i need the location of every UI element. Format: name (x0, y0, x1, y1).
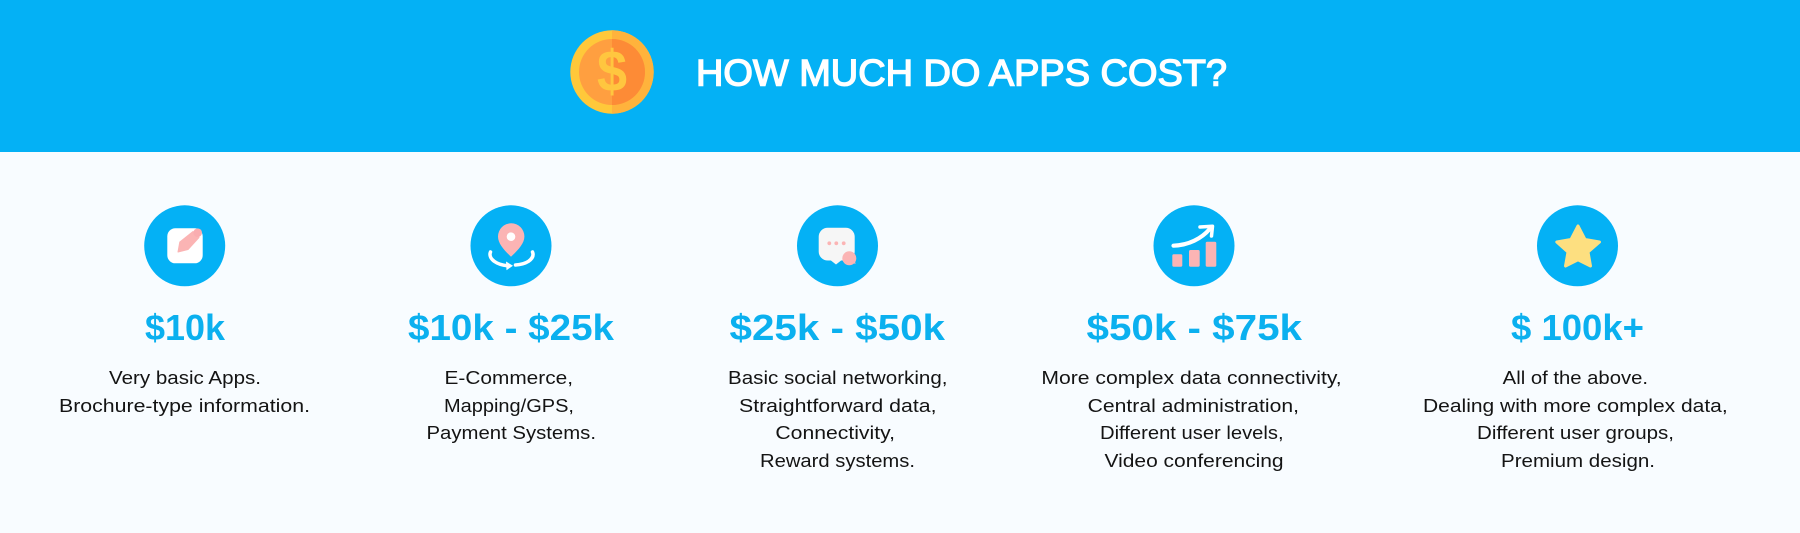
description (426, 367, 596, 443)
panel: $50k-$75k tier (1041, 205, 1342, 471)
description: Payment Systems. (426, 422, 596, 443)
price heading: $10k (145, 307, 226, 348)
panel: $100k+ tier (1423, 205, 1728, 471)
description: Premium design. (1501, 450, 1655, 471)
icon: chat bubble (797, 205, 878, 286)
description: Video conferencing (1104, 450, 1284, 471)
icon: growth bars with arrow (1154, 205, 1234, 286)
description: Mapping/GPS, (444, 395, 574, 416)
description: Different user levels, (1100, 422, 1284, 443)
description: Very basic Apps. (109, 367, 261, 388)
price heading: $50k - $75k (1086, 307, 1303, 348)
icon: map pin (470, 205, 552, 286)
description (728, 367, 948, 471)
panel: $10k tier (59, 205, 310, 416)
description: Dealing with more complex data, (1423, 395, 1728, 416)
price heading: $10k - $25k (408, 307, 615, 348)
description (1041, 367, 1342, 471)
description: Different user groups, (1477, 422, 1674, 443)
description: Central administration, (1088, 395, 1299, 416)
icon: dollar coin: $ (597, 39, 627, 104)
description: Brochure-type information. (59, 395, 310, 416)
panel: $10k-$25k tier (408, 205, 615, 443)
description: Connectivity, (775, 422, 895, 443)
description (1423, 367, 1728, 471)
panel: $25k-$50k tier (728, 205, 948, 471)
header banner (0, 0, 1800, 152)
description: Reward systems. (760, 450, 915, 471)
description: More complex data connectivity, (1041, 367, 1342, 388)
description: Straightforward data, (739, 395, 936, 416)
description: Basic social networking, (728, 367, 948, 388)
description: E-Commerce, (444, 367, 573, 388)
price heading: $25k - $50k (730, 307, 946, 348)
icon: dollar coin (570, 30, 654, 114)
icon: star (1537, 205, 1618, 286)
description: All of the above. (1503, 367, 1648, 388)
icon: note and pencil (144, 205, 225, 286)
price heading: $ 100k+ (1511, 307, 1644, 348)
title: HOW MUCH DO APPS COST? (696, 52, 1227, 94)
description (59, 367, 310, 416)
